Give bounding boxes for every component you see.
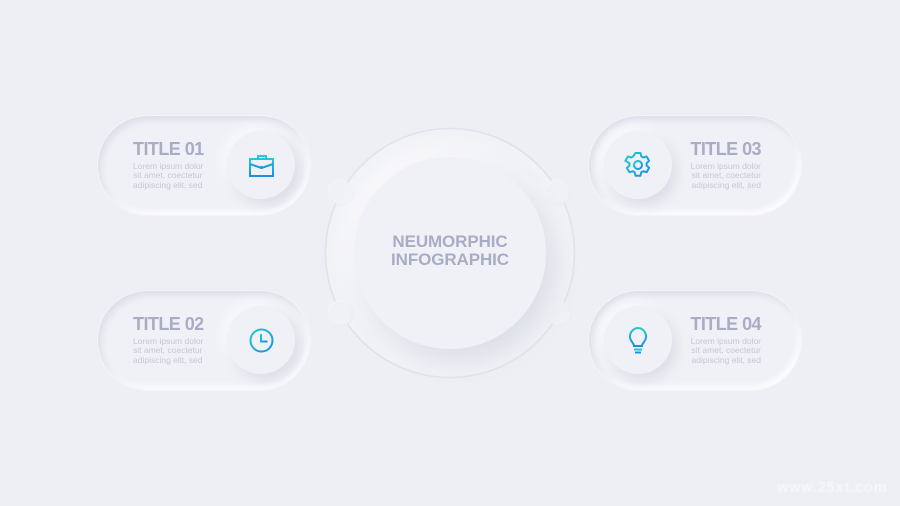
text: title 02 description: Lorem ipsum dolor: [133, 336, 203, 346]
text: title 02 description: [133, 336, 204, 365]
button: briefcase: [227, 131, 295, 199]
heading: title 02: TITLE 02: [133, 314, 204, 334]
text: title 04 description: Lorem ipsum dolor: [691, 336, 761, 346]
text: title 04 description: [691, 336, 761, 365]
text: title 03 description: adipiscing elit, sed: [692, 180, 761, 190]
text: title 01 description: sit amet, coectetur: [133, 170, 202, 180]
icon: light bulb: [628, 327, 648, 354]
heading: title 04: TITLE 04: [690, 314, 761, 334]
panel: title 04: [589, 291, 801, 390]
text: title 03 description: sit amet, coectetur: [692, 170, 761, 180]
central disc: [354, 157, 546, 349]
text: title 04 description: sit amet, coectetur: [692, 345, 761, 355]
button: light bulb: [604, 306, 672, 374]
heading: title 03: TITLE 03: [690, 139, 761, 159]
central heading: [391, 232, 509, 268]
button: clock: [227, 306, 295, 374]
heading: title 01: TITLE 01: [133, 139, 204, 159]
text: title 02 description: sit amet, coectetur: [133, 345, 202, 355]
text: title 04 description: adipiscing elit, sed: [692, 355, 761, 365]
text: title 01 description: [133, 161, 204, 190]
button: gear: [604, 131, 672, 199]
panel: title 01: [98, 116, 310, 215]
text: title 01 description: Lorem ipsum dolor: [133, 161, 203, 171]
text: title 01 description: adipiscing elit, sed: [133, 180, 202, 190]
node: upper left: [329, 181, 352, 204]
text: title 03 description: [691, 161, 761, 190]
central heading: NEUMORPHIC: [392, 232, 508, 251]
watermark: www.25xt.com: [777, 480, 887, 496]
icon: briefcase: [249, 155, 274, 177]
node: lower right: [547, 302, 570, 325]
icon: gear: [624, 152, 650, 177]
text: title 02 description: adipiscing elit, sed: [133, 355, 202, 365]
text: title 03 description: Lorem ipsum dolor: [691, 161, 761, 171]
icon: clock: [250, 328, 274, 352]
panel: title 02: [98, 291, 310, 390]
node: upper right: [546, 181, 569, 204]
node: lower left: [329, 302, 352, 325]
central ring: [324, 128, 575, 378]
panel: title 03: [589, 116, 801, 215]
central heading: INFOGRAPHIC: [391, 250, 509, 268]
